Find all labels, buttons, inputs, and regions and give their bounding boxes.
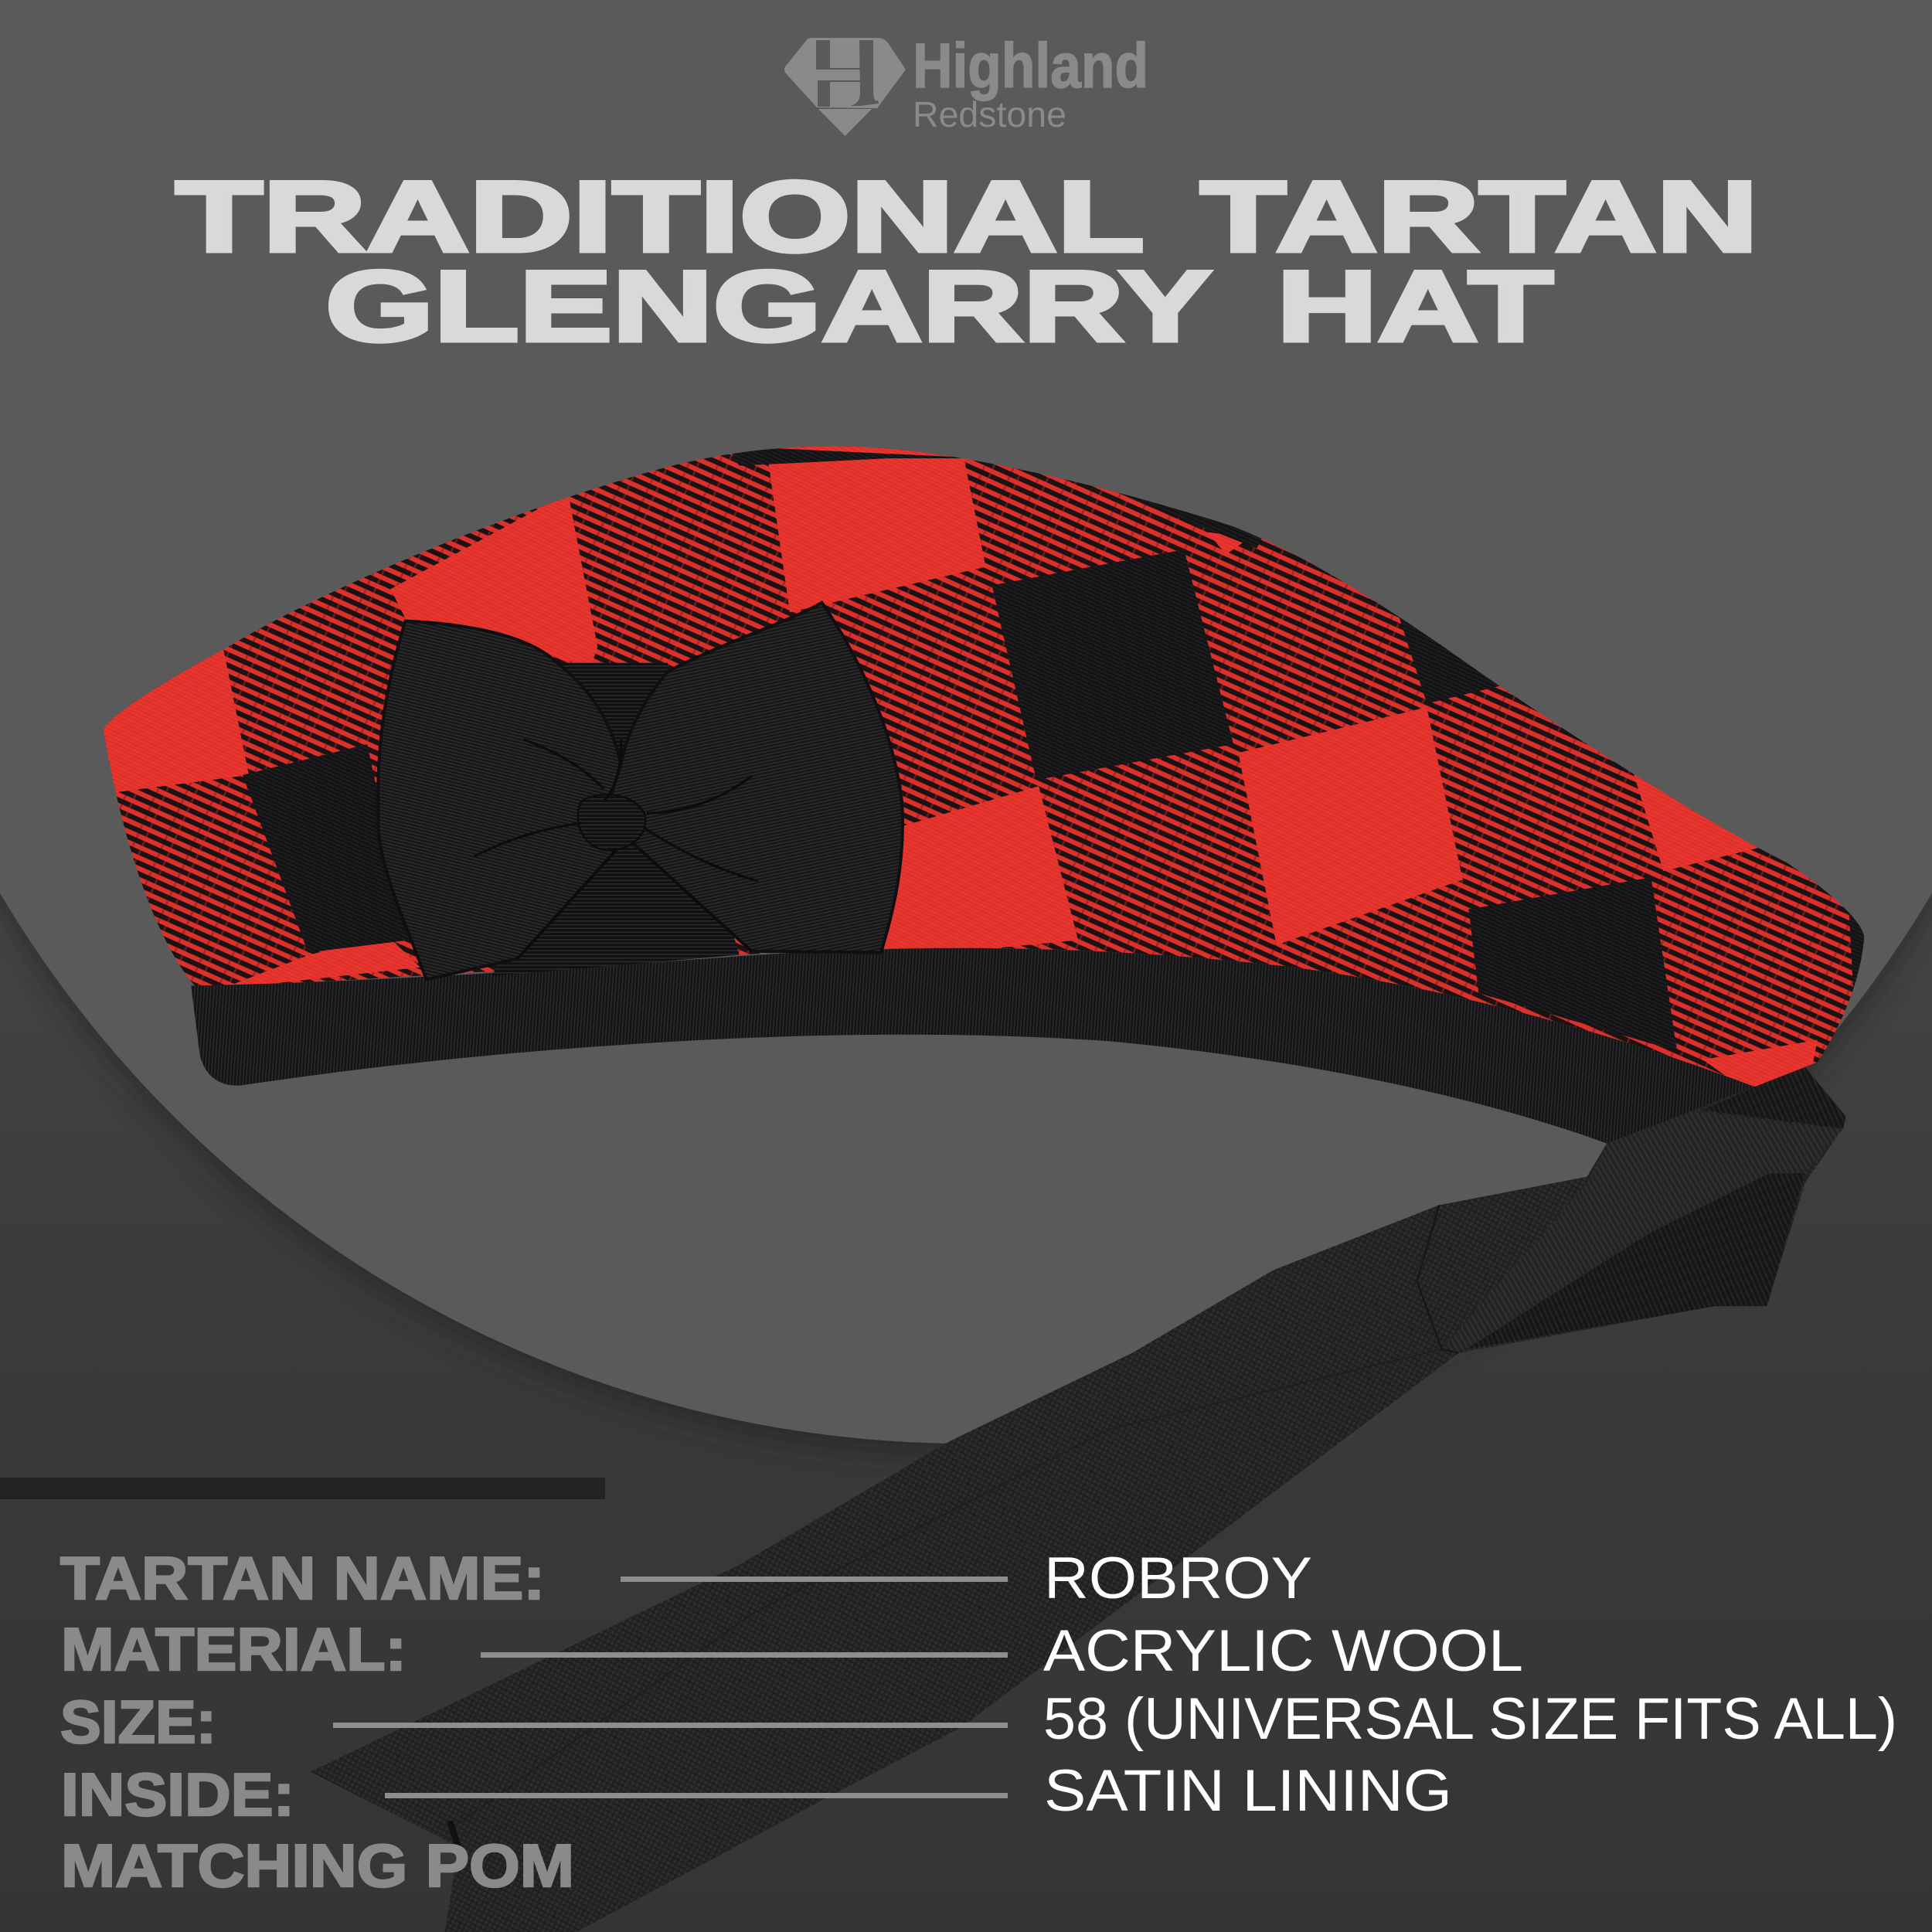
glengarry hat illustration	[74, 419, 1897, 1932]
solid black checks	[243, 446, 1872, 1051]
label: inside: INSIDE:	[61, 1760, 294, 1828]
logo	[784, 31, 1148, 136]
circle shadow	[0, 0, 1932, 1457]
bow right wing	[604, 603, 903, 952]
label: tartan name: TARTAN NAME:	[60, 1544, 545, 1612]
value: size: 58 (UNIVERSAL SIZE FITS ALL)	[1043, 1686, 1897, 1752]
hat crown: tartan	[104, 447, 1864, 1087]
label: material: MATERIAL:	[61, 1615, 406, 1683]
hat band	[191, 948, 1754, 1144]
leader lines	[333, 1577, 1008, 1798]
title line 1: TRADITIONAL	[175, 160, 1145, 273]
title line 2: GLENGARRY	[325, 250, 1212, 362]
logo wordmark: Redstone: Redstone	[913, 94, 1066, 134]
logo wordmark: Highland: Highland	[913, 31, 1148, 101]
bow	[378, 603, 903, 980]
value: robroy: ROBROY	[1044, 1546, 1312, 1611]
bow centre twist	[578, 794, 645, 850]
value: acrylic wool: ACRYLIC WOOL	[1043, 1618, 1523, 1684]
title	[175, 160, 1758, 362]
title line 1	[175, 160, 1758, 273]
solid red checks	[74, 431, 1818, 1097]
value: satin lining: SATIN LINING	[1044, 1758, 1452, 1824]
bow fold lines	[474, 740, 758, 958]
background circle	[0, 0, 1932, 1444]
label: matching pom: MATCHING POM	[61, 1832, 574, 1900]
title line 2: HAT	[1277, 250, 1553, 362]
title line 1: TARTAN	[1200, 160, 1758, 273]
dark accent bar	[0, 1478, 605, 1499]
label: size: SIZE:	[60, 1688, 216, 1756]
title line 2	[325, 250, 1553, 362]
spec values	[1043, 1546, 1897, 1824]
ribbon tail	[311, 1067, 1845, 1932]
logo mark	[784, 38, 906, 136]
spec labels	[60, 1544, 574, 1900]
bow left wing	[378, 621, 621, 980]
